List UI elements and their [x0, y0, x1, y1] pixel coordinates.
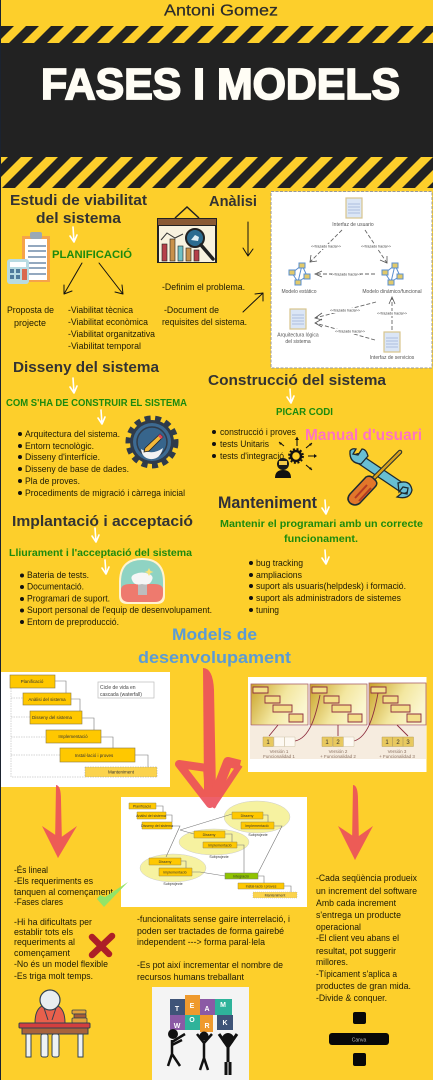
heading: manteniment: Manteniment [218, 493, 317, 512]
diagram: analysis models: <<trazado hacia>> [331, 272, 361, 276]
text: incremental model notes: -Típicament s'aplica a [316, 969, 397, 979]
diagram: spiral parallel subprojects: Implementació [163, 870, 187, 874]
list: disseny [18, 429, 185, 498]
diagram: incremental: 1 [385, 740, 389, 746]
text: parallel model notes: -funcionalitats sense gaire interrelació, i [137, 914, 290, 924]
label: mantenir el programari: Mantenir el programari amb un correcte [220, 519, 423, 530]
diagram: spiral parallel subprojects: Anàlisi del sistema [136, 814, 166, 818]
section: analisi [157, 194, 263, 327]
arrow: white down [70, 227, 77, 242]
list: disseny: Pla de proves. [25, 476, 80, 486]
diagram: incremental [248, 677, 426, 772]
label: planificacio: PLANIFICACIÓ [52, 248, 132, 261]
image: teamwork puzzle: T [175, 1006, 180, 1013]
caption box: cascada (waterfall) [100, 692, 142, 698]
list: disseny: Disseny de base de dades. [25, 464, 129, 474]
icon: green check [97, 882, 128, 907]
step: planificacio: Planificació [21, 679, 44, 684]
list: disseny: Procediments de migració i càrrega inicial [25, 488, 185, 498]
diagram: spiral parallel subprojects: Subprojecte [163, 882, 183, 886]
diagram: spiral parallel subprojects: Subprojecte [209, 855, 229, 859]
diagram: analysis models: Interfaz de servicios [370, 355, 415, 361]
step: analisi [23, 693, 71, 705]
header banner [1, 26, 433, 188]
icon: document architecture [290, 309, 306, 329]
list: implantacio: Documentació. [27, 582, 84, 592]
list: construccio: construcció i proves [220, 427, 296, 437]
text: incremental model notes: resultat, pot suggerir [316, 946, 396, 956]
diagram: spiral parallel subprojects: Disseny [203, 833, 216, 837]
image: teamwork puzzle: W [174, 1023, 181, 1030]
step: manteniment [85, 767, 157, 777]
image: teamwork puzzle [152, 987, 249, 1080]
arrow: white down [98, 410, 105, 424]
text: incremental model notes: -El client veu abans el [316, 933, 399, 943]
label: mantenir el programari [220, 519, 423, 545]
diagram: analysis models: Modelo estático [281, 289, 317, 295]
list: manteniment: tuning [256, 605, 279, 615]
text: proposta de projecte: projecte [14, 318, 46, 328]
text: analisi notes [162, 282, 247, 327]
step: disseny [30, 711, 82, 724]
text: incremental model notes: productes de gran mida. [316, 981, 411, 991]
list: construccio: tests d'integració [220, 451, 284, 461]
icon: person stressed at desk [19, 990, 90, 1057]
diagram: analysis models: Modelo dinámico/funcional [362, 289, 422, 295]
heading: disseny: Disseny del sistema [13, 360, 160, 376]
text: parallel model notes: poden ser tractades de forma gairebé [137, 926, 284, 936]
section: manteniment [218, 493, 423, 615]
step: instal·lacio [60, 748, 135, 762]
text: waterfall cons: començament [14, 948, 70, 958]
arrow: white down [102, 560, 109, 574]
text: proposta de projecte [7, 305, 54, 328]
diagram: incremental: + Funcionalidad 3 [379, 754, 415, 759]
icon: gear with pencil [128, 418, 176, 466]
list: implantacio: Bateria de tests. [27, 570, 89, 580]
icon: person with gear and rays [275, 437, 317, 478]
list: implantacio [20, 570, 212, 627]
heading: analisi: Anàlisi [209, 194, 257, 210]
icon: dental implant badge [119, 558, 165, 604]
text: viabilitat list: -Viabilitat temporal [68, 341, 141, 351]
diagram: spiral parallel subprojects: Disseny [241, 814, 254, 818]
list: construccio: tests Unitaris [220, 439, 269, 449]
text: incremental model notes: -Cada seqüència produeix [316, 873, 417, 883]
arrow: white down [287, 389, 294, 403]
list: implantacio: Entorn de preproducció. [27, 617, 119, 627]
diagram: spiral parallel subprojects: Implementació [208, 844, 232, 848]
text: waterfall cons: -Es triga molt temps. [14, 971, 93, 981]
arrow: white down [70, 378, 77, 393]
icon: analysis chart with magnifier [157, 207, 217, 263]
heading: models de desenvolupament [138, 625, 291, 667]
text: waterfall cons: requeriments al [14, 937, 75, 947]
text: parallel model notes: independent ---> forma paral·lela [137, 937, 265, 947]
text: waterfall pros: tanquen al començament [14, 887, 113, 897]
arrow: down to text [243, 222, 253, 256]
text: waterfall cons [14, 917, 108, 981]
list: disseny: Arquitectura del sistema. [25, 429, 120, 439]
diagram: incremental: 3 [406, 740, 410, 746]
diagram: analysis models: <<trazado hacia>> [361, 244, 391, 248]
text: waterfall pros: -Fases clares [14, 897, 63, 907]
text: waterfall pros [14, 865, 113, 907]
diagram: spiral parallel subprojects: Planificació [133, 804, 151, 808]
text: incremental model notes [316, 873, 417, 1003]
heading: models de desenvolupament: Models de [172, 625, 257, 644]
arrow: to proposta [64, 263, 82, 294]
arrow: to diagram [243, 293, 263, 312]
icon: network left [289, 263, 310, 285]
arrow: white down [322, 550, 329, 564]
label: mantenir el programari: funcionament. [284, 534, 358, 545]
diagram: incremental: 2 [396, 740, 400, 746]
text: parallel model notes: recursos humans treballant [137, 972, 244, 982]
heading: estudi de viabilitat [10, 193, 147, 227]
text: waterfall cons: establir tots els [14, 927, 73, 937]
image: teamwork puzzle: R [204, 1023, 210, 1030]
text: incremental model notes: un increment del software [316, 886, 417, 896]
text: parallel model notes [137, 914, 290, 982]
text: incremental model notes: millores. [316, 957, 348, 967]
diagram: incremental: 1 [266, 740, 270, 746]
diagram: spiral parallel subprojects: Integració [233, 874, 249, 878]
arrow: to viabilitat [99, 263, 123, 294]
image: teamwork puzzle: O [189, 1017, 195, 1024]
list: disseny: Entorn tecnològic. [25, 441, 94, 451]
diagram: incremental: Versión 3 [388, 749, 407, 754]
caption box [98, 682, 154, 698]
icon: document services [384, 332, 400, 352]
text: viabilitat list: -Viabilitat tècnica [68, 305, 133, 315]
diagram: spiral parallel subprojects: Subprojecte [248, 833, 268, 837]
heading: estudi de viabilitat: del sistema [36, 211, 122, 227]
heading: implantacio: Implantació i acceptació [12, 514, 193, 530]
text: waterfall cons: -No és un model flexible [14, 959, 108, 969]
text: analisi notes: -Definim el problema. [162, 282, 245, 292]
step: implementacio: Implementació [58, 734, 88, 739]
section: estudi de viabilitat [7, 193, 155, 351]
arrow: white down [322, 500, 329, 514]
text: viabilitat list [68, 305, 155, 351]
diagram: incremental: 2 [336, 740, 340, 746]
list: manteniment: ampliacions [256, 570, 302, 580]
list: disseny: Disseny d'interfície. [25, 452, 100, 462]
text: incremental model notes: s'entrega un producte [316, 910, 401, 920]
diagram: analysis models: Arquitectura lógica [277, 332, 319, 338]
icon: division sign [329, 1012, 389, 1066]
label: picar codi: PICAR CODI [276, 407, 333, 418]
diagram: incremental: 1 [325, 740, 329, 746]
arrow: white down [92, 528, 99, 542]
step: manteniment: Manteniment [108, 770, 135, 774]
step: implementacio [46, 730, 101, 743]
image: teamwork puzzle: K [222, 1020, 228, 1027]
text: viabilitat list: -Viabilitat organitzativa [68, 329, 155, 339]
list: construccio [212, 427, 296, 461]
list: manteniment: suport als usuaris(helpdesk) i formació. [256, 581, 406, 591]
text: parallel model notes: -Es pot així incrementar el nombre de [137, 960, 283, 970]
arrow: big red [179, 668, 240, 808]
image: teamwork puzzle: E [190, 1003, 195, 1010]
diagram: analysis models: <<trazado hacia>> [330, 308, 360, 312]
section: construccio del sistema [208, 373, 422, 505]
arrow: small red right [338, 785, 373, 860]
text: proposta de projecte: Proposta de [7, 305, 54, 315]
diagram: analysis models: <<trazado hacia>> [311, 244, 341, 248]
list: manteniment: bug tracking [256, 558, 303, 568]
list: manteniment [249, 558, 406, 615]
diagram: analysis models [271, 192, 432, 368]
icon: clipboard and calculator [7, 232, 50, 284]
icon: document user interface [346, 198, 362, 218]
diagram: analysis models: <<trazado hacia>> [335, 330, 365, 334]
diagram: spiral parallel subprojects [121, 797, 307, 907]
text: analisi notes: requisites del sistema. [162, 317, 247, 327]
title: FASES I MODELS [41, 60, 400, 109]
image: teamwork puzzle: A [204, 1006, 210, 1013]
heading: construccio: Construcció del sistema [208, 373, 387, 389]
diagram: incremental: + Funcionalidad 2 [320, 754, 356, 759]
text: incremental model notes: Amb cada increment [316, 898, 396, 908]
image: teamwork puzzle: M [220, 1002, 226, 1009]
step: planificacio [10, 675, 55, 688]
text: viabilitat list: -Viabilitat econòmica [68, 317, 148, 327]
text: analisi notes: -Document de [164, 305, 219, 315]
list: manteniment: suport als administradors de sistemes [256, 593, 401, 603]
diagram: spiral parallel subprojects: Disseny del sistema [141, 824, 173, 828]
diagram: waterfall [1, 672, 170, 787]
step: disseny: Disseny del sistema [32, 715, 73, 720]
icon: wrench and screwdriver [348, 449, 412, 505]
arrow: small red left [42, 785, 77, 858]
label: manual d'usuari: Manual d'usuari [305, 427, 422, 444]
section: implantacio i acceptacio [9, 514, 212, 627]
text: waterfall cons: -Hi ha dificultats per [14, 917, 92, 927]
diagram: spiral parallel subprojects: Implementació [245, 824, 269, 828]
icon: division sign: Canva [352, 1038, 366, 1044]
label: lliurament: Lliurament i l'acceptació del sistema [9, 548, 192, 559]
diagram: analysis models: Interfaz de usuario [332, 222, 374, 228]
diagram: analysis models: <<trazado hacia>> [377, 312, 407, 316]
icon: red cross [92, 936, 112, 955]
list: implantacio: Programari de suport. [27, 594, 110, 604]
text: waterfall pros: -És lineal [14, 865, 48, 875]
diagram: analysis models: del sistema [285, 339, 311, 345]
diagram: spiral parallel subprojects: Manteniment [265, 894, 285, 898]
icon: network right [382, 263, 403, 285]
diagram: incremental: Funcionalidad 1 [263, 754, 295, 759]
heading: estudi de viabilitat: Estudi de viabilitat [10, 193, 147, 209]
label: com s'ha de construir: COM S'HA DE CONSTRUIR EL SISTEMA [6, 398, 187, 409]
step: analisi: Anàlisi del sistema [28, 697, 66, 702]
heading: models de desenvolupament: desenvolupament [138, 648, 291, 667]
text: incremental model notes: operacional [316, 922, 361, 932]
diagram: spiral parallel subprojects: Instal·lació i proves [246, 884, 277, 888]
section: disseny del sistema [6, 360, 187, 498]
diagram: incremental: Versión 2 [329, 749, 348, 754]
author name: Antoni Gomez [164, 2, 278, 20]
text: incremental model notes: -Divide & conquer. [316, 993, 387, 1003]
diagram: spiral parallel subprojects: Disseny [159, 860, 172, 864]
list: implantacio: Suport personal de l'equip de desenvolupament. [27, 605, 212, 615]
caption box: Cicle de vida en [100, 685, 136, 691]
diagram: incremental: Versión 1 [270, 749, 289, 754]
step: instal·lacio: Instal·lació i proves [75, 753, 114, 758]
text: waterfall pros: -Els requeriments es [14, 876, 93, 886]
